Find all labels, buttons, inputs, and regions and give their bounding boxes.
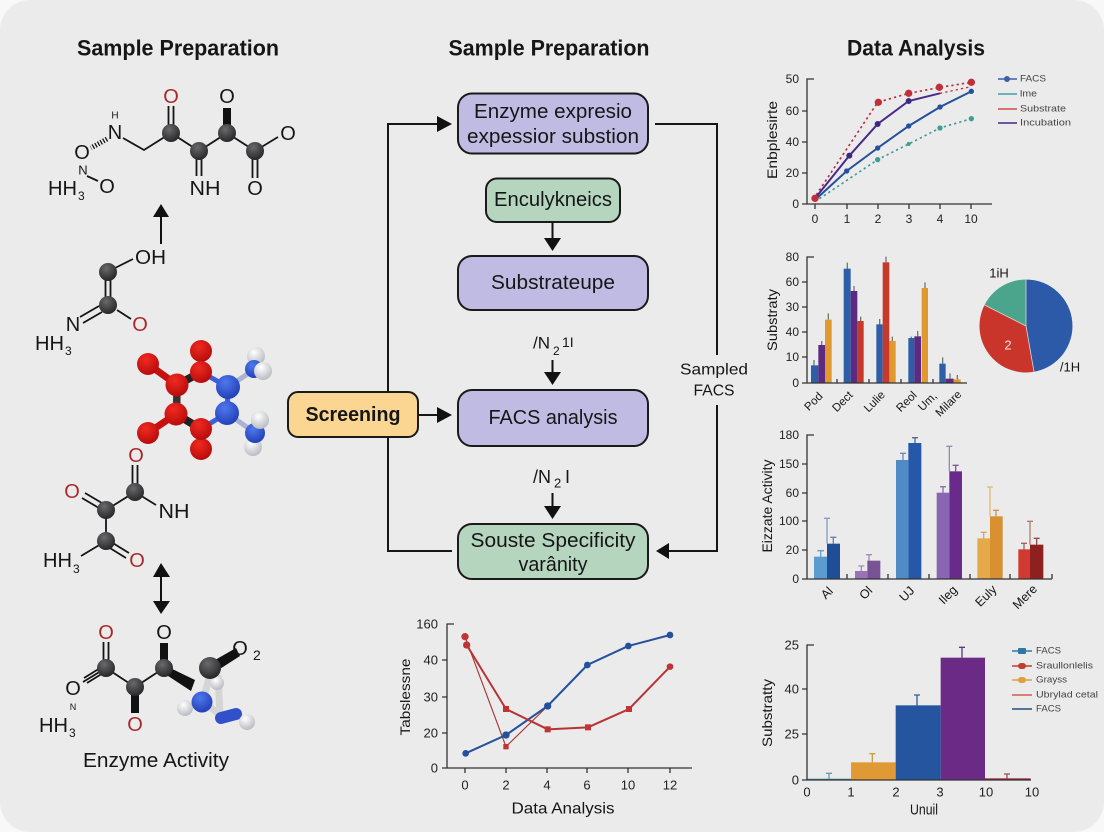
- legend: FACS: [1020, 74, 1046, 84]
- connector: screening up to enzyme expression: [388, 116, 452, 392]
- arrow: to FACS analysis: [544, 360, 561, 385]
- molecule: amide structure: O: [129, 550, 145, 572]
- y axis label: Enbplesirte: [764, 101, 780, 179]
- x tick labels: Um,: [916, 390, 940, 414]
- legend: Incubation: [1020, 118, 1071, 128]
- x tick labels: 4: [543, 778, 551, 792]
- molecule: hydroxyl structure: [35, 247, 166, 358]
- x tick labels: 3: [936, 784, 944, 800]
- y tick labels: 40: [786, 135, 799, 149]
- molecule: top structure: O: [99, 176, 115, 198]
- x tick labels: 2: [502, 778, 510, 792]
- legend: Ubrylad cetal: [1036, 690, 1098, 700]
- y tick labels: 25: [785, 726, 799, 742]
- molecule: amide structure: [43, 445, 190, 576]
- caption: enzyme activity: Enzyme Activity: [83, 750, 229, 772]
- flow box: substrate specificity: [458, 524, 648, 579]
- x tick labels: Al: [818, 584, 836, 602]
- molecule: hydroxyl structure: N: [66, 314, 80, 336]
- y tick labels: 20: [786, 166, 799, 180]
- step label: N2 lower: I: [565, 467, 570, 487]
- y tick labels: 60: [786, 104, 799, 118]
- pie chart: /1H: [1060, 360, 1080, 374]
- y tick labels: 50: [786, 72, 799, 86]
- y tick labels: 20: [786, 543, 799, 557]
- step label: N2 upper: [533, 334, 574, 358]
- molecule: hydroxyl structure: 3: [65, 344, 72, 358]
- molecule: lower structure with 3D amine: HH: [39, 715, 68, 737]
- step label: N2 lower: [533, 467, 570, 490]
- molecule: top structure: O: [247, 178, 263, 200]
- y tick labels: 30: [786, 300, 799, 314]
- pie chart: [979, 266, 1080, 374]
- flow box: substrate: Substrateupe: [491, 272, 615, 294]
- molecule: amide structure: O: [128, 445, 144, 467]
- x tick labels: [803, 389, 964, 419]
- flow box: enzyme expression: Enzyme expresio: [474, 101, 632, 123]
- bar chart: enzyme activity: [759, 428, 1052, 612]
- x tick labels: [803, 784, 1039, 800]
- step label: N2 upper: 1I: [562, 334, 574, 350]
- legend: Sraullonlelis: [1036, 660, 1093, 672]
- flow box: kinetics: [486, 178, 620, 222]
- molecule: top structure: 3: [78, 189, 85, 203]
- flow box: kinetics: Enculykneics: [494, 189, 612, 211]
- y tick labels: 160: [416, 616, 438, 632]
- molecule: lower structure with 3D amine: O: [232, 638, 248, 660]
- flow box: screening: Screening: [306, 404, 400, 426]
- molecule: top structure: [48, 86, 296, 203]
- grouped bar chart: substrate: [764, 250, 967, 419]
- connector: feedback loop to specificity: [655, 124, 717, 559]
- histogram: substrate: [759, 638, 1098, 818]
- y tick labels: 20: [424, 726, 438, 740]
- y tick labels: 60: [786, 486, 799, 500]
- y tick labels: 180: [779, 428, 799, 442]
- step label: N2 upper: 2: [553, 344, 560, 358]
- x tick labels: 2: [892, 784, 900, 800]
- legend: lme: [1020, 88, 1037, 100]
- molecule: lower structure with 3D amine: 2: [253, 647, 261, 663]
- y tick labels: 100: [779, 514, 799, 528]
- flow box: substrate: [458, 256, 648, 310]
- y tick labels: 150: [779, 457, 799, 471]
- y tick labels: 60: [786, 275, 799, 289]
- y tick labels: 80: [786, 250, 799, 264]
- molecule: top structure: O: [74, 142, 90, 164]
- molecule: amide structure: NH: [158, 501, 190, 523]
- heading: data analysis: Data Analysis: [847, 36, 985, 60]
- y tick labels: 0: [431, 760, 438, 776]
- x tick labels: 10: [621, 778, 635, 792]
- x tick labels: [818, 582, 1040, 612]
- x tick labels: Lulie: [862, 389, 888, 415]
- x tick labels: 6: [583, 778, 591, 792]
- x tick labels: Ol: [857, 584, 875, 602]
- legend: Substrate: [1020, 104, 1066, 114]
- line chart: top right: [764, 72, 1071, 226]
- y tick labels: 30: [424, 690, 438, 704]
- molecule: top structure: H: [111, 110, 119, 122]
- legend: [1012, 646, 1098, 714]
- y tick labels: 40: [786, 325, 799, 339]
- arrow: kinetics to substrate: [544, 222, 561, 251]
- molecule: top structure: O: [163, 86, 179, 108]
- x tick labels: Pod: [803, 391, 825, 413]
- y tick labels: 0: [792, 376, 799, 390]
- pie chart: 2: [1004, 338, 1012, 352]
- molecule: top structure: N: [78, 162, 88, 178]
- molecule: lower structure with 3D amine: O: [156, 622, 172, 644]
- data series: [461, 632, 673, 757]
- x tick labels: Ileg: [936, 583, 960, 607]
- arrow: double headed: [153, 563, 170, 614]
- x tick labels: 0: [803, 784, 811, 800]
- molecule: top structure: O: [219, 86, 235, 108]
- legend: FACS: [1036, 704, 1061, 714]
- bars: [807, 647, 1031, 780]
- pie chart: 1iH: [989, 266, 1009, 280]
- arrow: up: [153, 204, 169, 244]
- x tick labels: 0: [461, 778, 469, 792]
- x tick labels: 4: [937, 212, 944, 226]
- x tick labels: Dect: [830, 389, 856, 415]
- y tick labels: 40: [424, 652, 438, 668]
- flow box: screening: [288, 392, 418, 437]
- heading: sample preparation centre: Sample Preparation: [448, 36, 650, 60]
- connector: screening down to specificity: [388, 437, 452, 551]
- step label: N2 lower: 2: [554, 476, 561, 490]
- bars: [811, 257, 961, 383]
- y tick labels: [416, 616, 438, 776]
- y tick labels: 10: [786, 350, 799, 364]
- x tick labels: 1: [844, 212, 851, 226]
- flow box: enzyme expression: [458, 94, 648, 154]
- x tick labels: Reol: [894, 389, 920, 415]
- flow box: substrate specificity: varânity: [518, 554, 588, 576]
- x tick labels: [812, 212, 978, 226]
- legend: FACS: [1036, 646, 1061, 656]
- y tick labels: 0: [792, 572, 799, 586]
- molecule: lower structure with 3D amine: [39, 622, 261, 740]
- y axis label: Substraty: [764, 289, 780, 351]
- connector label: sampled FACS: Sampled: [680, 362, 748, 378]
- x tick labels: 0: [812, 212, 819, 226]
- y tick labels: [785, 638, 799, 788]
- x axis title: Unuil: [910, 802, 938, 818]
- molecule: top structure: O: [280, 123, 296, 145]
- molecule: amide structure: 3: [73, 562, 80, 576]
- molecule: 3D ball and stick model: [137, 340, 272, 460]
- heading: sample preparation left: Sample Preparation: [77, 36, 279, 60]
- x tick labels: 2: [875, 212, 882, 226]
- molecule: amide structure: HH: [43, 550, 72, 572]
- x tick labels: UJ: [897, 584, 917, 604]
- data series: [811, 79, 975, 202]
- x tick labels: 10: [964, 212, 978, 226]
- molecule: hydroxyl structure: O: [132, 314, 148, 336]
- y tick labels: 40: [785, 682, 799, 696]
- x tick labels: 1: [847, 784, 855, 800]
- y axis label: Tabslessne: [397, 658, 413, 736]
- molecule: hydroxyl structure: OH: [135, 247, 166, 269]
- x tick labels: 12: [663, 778, 677, 792]
- x axis title: data analysis: Data Analysis: [512, 800, 614, 818]
- line chart: bottom centre: [397, 616, 692, 792]
- y tick labels: 25: [785, 638, 799, 652]
- molecule: top structure: HH: [48, 178, 77, 200]
- step label: N2 upper: /N: [533, 334, 550, 352]
- y tick labels: [786, 250, 799, 390]
- flow box: enzyme expression: expessior substion: [467, 126, 639, 148]
- molecule: top structure: NH: [190, 178, 220, 200]
- x tick labels: 10: [979, 784, 993, 800]
- molecule: lower structure with 3D amine: 3: [69, 726, 76, 740]
- molecule: lower structure with 3D amine: O: [98, 622, 114, 644]
- x tick labels: 3: [906, 212, 913, 226]
- molecule: lower structure with 3D amine: O: [65, 678, 81, 700]
- molecule: lower structure with 3D amine: O: [127, 714, 143, 736]
- x tick labels: 10: [1025, 784, 1039, 800]
- flow box: FACS analysis: FACS analysis: [488, 407, 618, 429]
- y axis label: Eizzate Activity: [759, 460, 775, 552]
- arrow: to specificity: [544, 493, 561, 519]
- flow box: substrate specificity: Souste Specificity: [470, 530, 636, 552]
- y tick labels: 0: [792, 772, 799, 788]
- bars: [814, 438, 1043, 579]
- connector label: sampled FACS: FACS: [694, 382, 734, 400]
- connector label: sampled FACS: [680, 362, 748, 400]
- y tick labels: [779, 428, 799, 586]
- molecule: top structure: N: [108, 122, 122, 144]
- y tick labels: [786, 72, 799, 211]
- legend: [998, 74, 1071, 128]
- y axis label: Substratty: [759, 679, 775, 747]
- molecule: lower structure with 3D amine: N: [70, 702, 76, 712]
- x tick labels: [461, 778, 677, 792]
- y tick labels: 0: [792, 197, 799, 211]
- x tick labels: Mere: [1010, 582, 1040, 612]
- step label: N2 lower: /N: [533, 467, 551, 487]
- connector: screening to FACS analysis: [418, 407, 452, 423]
- x tick labels: Euly: [972, 582, 1000, 610]
- molecule: amide structure: O: [64, 481, 80, 503]
- flow box: FACS analysis: [458, 390, 648, 446]
- molecule: hydroxyl structure: HH: [35, 333, 64, 355]
- legend: Grayss: [1036, 674, 1067, 686]
- x tick labels: Milare: [934, 389, 964, 419]
